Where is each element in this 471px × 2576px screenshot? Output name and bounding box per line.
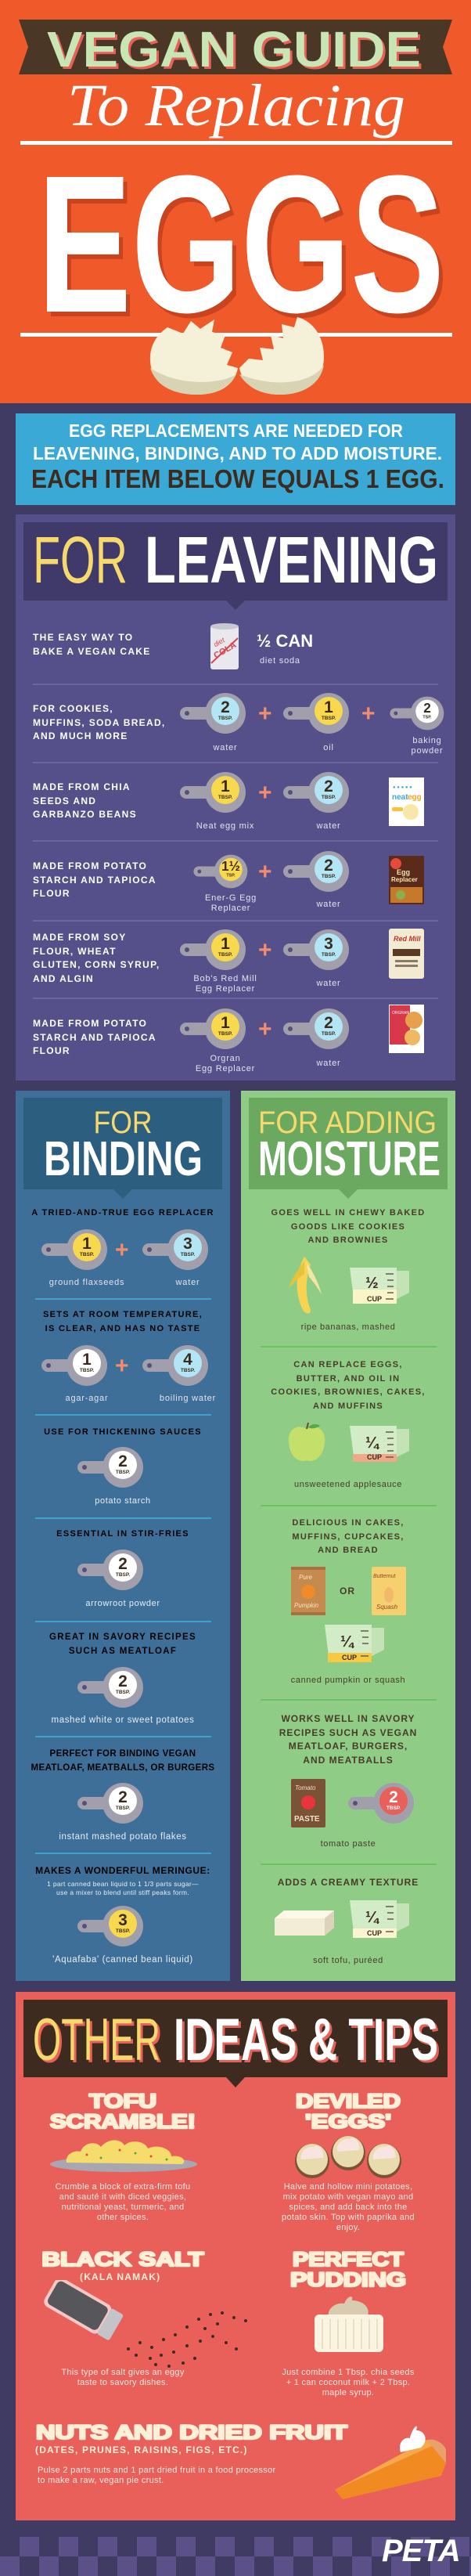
icon: quarter cup: CUP <box>367 1929 382 1937</box>
icon: ener-g box: Replacer <box>391 876 418 883</box>
moisture item: tomato paste: TBSP. <box>387 1806 401 1811</box>
row 5: bob's red mill: AND ALGIN <box>33 972 94 983</box>
row 5: bob's red mill: GLUTEN, CORN SYRUP, <box>33 959 160 970</box>
row 2: water oil baking powder: TBSP. <box>322 716 336 721</box>
binding item: mashed potatoes <box>49 1633 196 1725</box>
binding item: mashed potatoes: SUCH AS MEATLOAF <box>69 1646 177 1655</box>
icon: pumpkin can: Pure <box>299 1574 312 1581</box>
moisture item: soft tofu: soft tofu, puréed <box>313 1956 383 1965</box>
icon: salt shaker with grains <box>27 2280 253 2368</box>
tip: black salt: This type of salt gives an eggy <box>61 2368 185 2377</box>
row 4: ener-g: 2 <box>324 857 333 875</box>
moisture item: tomato paste: RECIPES SUCH AS VEGAN <box>279 1727 417 1738</box>
row 1: diet soda: BAKE A VEGAN CAKE <box>33 645 151 656</box>
heading: for leavening <box>23 522 448 610</box>
row 2: water oil baking powder: MUFFINS, SODA BREAD, <box>33 717 166 728</box>
moisture item: bananas <box>271 1208 426 1332</box>
binding item: potato flakes: MEATLOAF, MEATBALLS, OR BURGERS <box>31 1763 214 1773</box>
moisture item: applesauce: COOKIES, BROWNIES, CAKES, <box>271 1387 426 1397</box>
icon: cracked egg shells <box>150 317 324 395</box>
row 6: orgran: water <box>317 1059 340 1068</box>
binding item: potato starch: potato starch <box>95 1496 151 1506</box>
row 5: bob's red mill: FLOUR, WHEAT <box>33 946 117 957</box>
row 6: orgran: 2 <box>324 1014 333 1032</box>
binding item: aquafaba <box>35 1865 210 1964</box>
tip: tofu scramble: nutritional yeast, turmeric, and <box>62 2203 184 2212</box>
binding item: potato flakes: TBSP. <box>116 1806 130 1811</box>
icon: diet cola can <box>210 623 239 669</box>
moisture item: tomato paste: WORKS WELL IN SAVORY <box>281 1713 415 1724</box>
row 2: water oil baking powder: FOR COOKIES, <box>33 703 113 714</box>
row 4: ener-g: TBSP. <box>322 874 336 879</box>
row 2: water oil baking powder: AND MUCH MORE <box>33 731 128 741</box>
row 2: water oil baking powder: 2 <box>221 698 230 716</box>
tip: nuts and dried fruit: (DATES, PRUNES, RAISINS, FIGS, ETC.) <box>35 2444 248 2455</box>
moisture item: tomato paste: MEATLOAF, BURGERS, <box>289 1741 408 1752</box>
binding item: flaxseeds: 1 <box>82 1235 92 1253</box>
icon: quarter cup <box>325 1625 384 1662</box>
moisture item: bananas: ripe bananas, mashed <box>301 1322 395 1332</box>
binding item: arrowroot: arrowroot powder <box>85 1599 160 1608</box>
row 4: ener-g: MADE FROM POTATO <box>33 860 147 871</box>
binding item: potato starch: TBSP. <box>116 1470 130 1475</box>
tip: deviled eggs: DEVILED <box>296 2091 401 2112</box>
icon: pumpkin can <box>291 1567 325 1615</box>
moisture item: pumpkin or squash: DELICIOUS IN CAKES, <box>292 1518 404 1528</box>
tip: tofu scramble: other spices. <box>97 2213 149 2222</box>
intro info box: EGG REPLACEMENTS ARE NEEDED FOR <box>69 420 403 441</box>
row 5: bob's red mill: MADE FROM SOY <box>33 932 127 943</box>
row 5: bob's red mill: TBSP. <box>218 952 232 958</box>
row 4: ener-g: + <box>258 859 272 885</box>
icon: ener-g box: Egg <box>397 868 410 876</box>
moisture item: tomato paste: 2 <box>389 1788 398 1806</box>
row 3: neat egg <box>33 772 424 831</box>
header: orange title area <box>0 0 471 403</box>
row 5: bob's red mill: 3 <box>324 935 333 953</box>
row 4: ener-g: TSP. <box>226 873 236 878</box>
binding item: potato flakes: 2 <box>118 1788 128 1806</box>
binding item: agar-agar: + <box>115 1353 129 1379</box>
icon: bob's red mill bag: Red Mill <box>394 935 421 943</box>
tip: deviled eggs <box>282 2091 415 2232</box>
moisture item: soft tofu: ADDS A CREAMY TEXTURE <box>278 1877 419 1888</box>
binding item: flaxseeds: TBSP. <box>80 1252 94 1257</box>
moisture item: tomato paste: AND MEATBALLS <box>303 1754 394 1765</box>
heading: other ideas and tips: OTHER <box>35 2009 163 2076</box>
icon: ener-g box <box>389 856 424 904</box>
tip: deviled eggs: potato skin. Top with paprika and <box>282 2213 415 2222</box>
title banner ribbon: VEGAN GUIDE <box>49 23 423 80</box>
panel: for binding <box>16 1091 230 1981</box>
icon: pumpkin can: Pumpkin <box>294 1602 319 1609</box>
binding item: agar-agar: TBSP. <box>80 1368 94 1373</box>
binding item: agar-agar: TBSP. <box>181 1368 195 1373</box>
tip: black salt: taste to savory dishes. <box>77 2378 168 2387</box>
moisture item: applesauce <box>271 1360 426 1489</box>
moisture item: tomato paste <box>279 1713 417 1849</box>
tip: perfect pudding: + 1 can coconut milk + 2 Tbsp. <box>286 2378 410 2387</box>
heading: other ideas and tips: OTHER <box>33 2007 160 2073</box>
row 2: water oil baking powder: TBSP. <box>218 716 232 721</box>
binding item: agar-agar: boiling water <box>160 1394 216 1403</box>
icon: neat egg package: egg <box>408 793 422 802</box>
icon: quarter cup: ¼ <box>365 1434 380 1452</box>
icon: squash can: Butternut <box>373 1574 396 1579</box>
binding item: flaxseeds: TBSP. <box>181 1252 195 1257</box>
row 4: ener-g: Replacer <box>211 904 250 913</box>
binding item: potato flakes <box>31 1749 214 1842</box>
binding item: aquafaba: use a mixer to blend until stiff peaks form. <box>56 1889 189 1896</box>
moisture item: pumpkin or squash <box>291 1518 406 1685</box>
icon: quarter cup: CUP <box>367 1453 382 1461</box>
tip: deviled eggs: spices, and add back into the <box>289 2203 408 2212</box>
tip: deviled eggs: mix potato with vegan mayo and <box>283 2192 413 2202</box>
moisture item: bananas: GOODS LIKE COOKIES <box>291 1221 405 1231</box>
row 4: ener-g: 1½ <box>221 859 240 874</box>
row 5: bob's red mill: Bob's Red Mill <box>193 974 257 983</box>
tip: black salt: (KALA NAMAK) <box>80 2271 160 2282</box>
binding item: arrowroot: ESSENTIAL IN STIR-FRIES <box>56 1529 189 1539</box>
binding item: mashed potatoes: mashed white or sweet potatoes <box>52 1716 194 1725</box>
icon: orgran box: ORGRAN <box>392 1011 409 1016</box>
row 2: water oil baking powder: TSP. <box>422 715 432 720</box>
binding item: flaxseeds <box>31 1208 214 1287</box>
moisture item: bananas: AND BROWNIES <box>308 1236 388 1245</box>
row 3: neat egg: 2 <box>324 777 333 796</box>
intro info box: LEAVENING, BINDING, AND TO ADD MOISTURE. <box>33 443 442 464</box>
row 2: water oil baking powder: 2 <box>423 701 431 716</box>
row 6: orgran: + <box>258 1016 272 1042</box>
row 3: neat egg: MADE FROM CHIA <box>33 781 131 792</box>
icon: quarter cup <box>350 1900 409 1938</box>
row 2: water oil baking powder: powder <box>412 745 443 755</box>
binding item: arrowroot: 2 <box>118 1555 128 1573</box>
moisture item: tomato paste: tomato paste <box>321 1839 376 1849</box>
binding item: agar-agar: 4 <box>183 1351 192 1369</box>
binding item: agar-agar: 1 <box>82 1351 92 1369</box>
row 1: diet soda: THE EASY WAY TO <box>33 632 133 643</box>
icon: deviled potato eggs <box>292 2131 404 2178</box>
row 3: neat egg: 1 <box>221 777 230 796</box>
row 5: bob's red mill: 1 <box>221 935 230 953</box>
icon: half cup: CUP <box>367 1295 382 1303</box>
tip: tofu scramble <box>49 2091 197 2222</box>
icon: banana <box>289 1257 322 1314</box>
moisture item: applesauce: BUTTER, AND OIL IN <box>297 1373 400 1383</box>
row 6: orgran: Orgran <box>210 1054 241 1063</box>
binding item: flaxseeds: A TRIED-AND-TRUE EGG REPLACER <box>31 1208 214 1218</box>
logo: PETA: PETA <box>382 2534 460 2568</box>
row 4: ener-g: water <box>317 900 340 909</box>
binding item: mashed potatoes: TBSP. <box>116 1690 130 1695</box>
binding item: agar-agar <box>41 1310 216 1403</box>
row 5: bob's red mill: water <box>317 979 340 988</box>
intro info box <box>16 413 455 505</box>
row 4: ener-g: STARCH AND TAPIOCA <box>33 874 156 885</box>
title banner ribbon: VEGAN GUIDE <box>47 21 421 78</box>
icon: half cup <box>350 1268 409 1304</box>
row 6: orgran: FLOUR <box>33 1045 70 1056</box>
icon: squash can: Squash <box>376 1604 398 1611</box>
icon: tomato paste can: PASTE <box>294 1815 320 1824</box>
row 6: orgran: Egg Replacer <box>196 1063 255 1073</box>
tip: deviled eggs: enjoy. <box>336 2223 360 2232</box>
footer checker band <box>0 2537 471 2576</box>
binding item: aquafaba: TBSP. <box>116 1928 130 1934</box>
tip: perfect pudding <box>254 2246 442 2402</box>
binding item: flaxseeds: 3 <box>183 1235 192 1253</box>
moisture item: soft tofu <box>275 1877 419 1965</box>
row 4: ener-g: FLOUR <box>33 888 70 899</box>
row 5: bob's red mill: + <box>258 937 272 963</box>
moisture item: bananas: GOES WELL IN CHEWY BAKED <box>271 1208 426 1218</box>
moisture item: pumpkin or squash: MUFFINS, CUPCAKES, <box>292 1532 404 1541</box>
heading: for adding moisture: FOR ADDING <box>258 1106 437 1140</box>
row 4: ener-g: Ener-G Egg <box>205 893 257 903</box>
heading: other ideas and tips <box>23 2000 448 2087</box>
row 2: water oil baking powder: + <box>258 701 272 727</box>
binding item: agar-agar: agar-agar <box>66 1394 108 1403</box>
icon: neat egg package <box>389 777 424 826</box>
binding item: arrowroot: TBSP. <box>116 1572 130 1578</box>
moisture item: applesauce: unsweetened applesauce <box>294 1480 402 1489</box>
binding item: potato starch: 2 <box>118 1452 128 1470</box>
icon: diet cola can: COLA <box>212 640 238 661</box>
row 2: water oil baking powder <box>33 693 444 755</box>
binding item: agar-agar: IS CLEAR, AND HAS NO TASTE <box>45 1323 200 1333</box>
moisture item: applesauce: CAN REPLACE EGGS, <box>293 1360 403 1369</box>
tip: black salt <box>23 2246 250 2390</box>
binding item: flaxseeds: ground flaxseeds <box>49 1278 124 1287</box>
row 5: bob's red mill: Egg Replacer <box>196 983 255 993</box>
moisture item: applesauce: AND MUFFINS <box>313 1402 383 1411</box>
row 4: ener-g <box>33 851 424 913</box>
row 2: water oil baking powder: water <box>214 743 237 752</box>
binding item: potato flakes: instant mashed potato flakes <box>59 1832 187 1842</box>
binding item: potato starch: USE FOR THICKENING SAUCES <box>44 1427 202 1437</box>
icon: quarter cup: ¼ <box>340 1633 355 1651</box>
binding item: potato flakes: PERFECT FOR BINDING VEGAN <box>50 1749 196 1759</box>
tip: nuts and dried fruit <box>31 2418 446 2500</box>
icon: neat egg package: ● ● ● ● ● <box>393 785 412 790</box>
icon: tomato paste can <box>291 1779 325 1827</box>
tip: perfect pudding: maple syrup. <box>322 2388 374 2397</box>
moisture item: pumpkin or squash: OR <box>340 1586 355 1596</box>
tip: tofu scramble: TOFU <box>89 2091 156 2112</box>
heading: for leavening: FOR <box>33 523 128 597</box>
row 2: water oil baking powder: oil <box>323 743 334 752</box>
tip: nuts and dried fruit: Pulse 2 parts nuts and 1 part dried fruit in a food processor <box>38 2466 275 2475</box>
binding item: aquafaba: MAKES A WONDERFUL MERINGUE: <box>35 1865 210 1876</box>
row 2: water oil baking powder: + <box>361 701 376 727</box>
icon: pumpkin pie slice <box>333 2418 446 2499</box>
icon: quarter cup <box>350 1426 409 1462</box>
panel: for leavening <box>16 514 455 1081</box>
script subtitle: To Replacing <box>67 73 405 139</box>
binding item: potato starch <box>44 1427 202 1506</box>
tip: tofu scramble: and sauté it with diced veggies, <box>59 2192 186 2202</box>
heading: for binding: FOR <box>94 1106 152 1140</box>
icon: green apple <box>288 1422 325 1461</box>
row 3: neat egg: water <box>317 821 340 831</box>
binding item: aquafaba: 1 part canned bean liquid to 1 1/3 parts sugar— <box>47 1880 199 1888</box>
binding item: agar-agar: SETS AT ROOM TEMPERATURE, <box>43 1310 203 1319</box>
row 6: orgran: STARCH AND TAPIOCA <box>33 1032 156 1043</box>
icon: tofu block <box>275 1910 334 1936</box>
icon: pudding ramekin <box>313 2294 385 2354</box>
tip: nuts and dried fruit: to make a raw, vegan pie crust. <box>38 2476 164 2485</box>
row 3: neat egg: GARBANZO BEANS <box>33 809 137 820</box>
row 6: orgran: 1 <box>221 1014 230 1032</box>
icon: quarter cup: ¼ <box>365 1909 380 1926</box>
row 6: orgran <box>33 1005 424 1073</box>
row 6: orgran: MADE FROM POTATO <box>33 1018 147 1029</box>
row 3: neat egg: SEEDS AND <box>33 796 96 806</box>
icon: bob's red mill bag <box>389 929 424 979</box>
icon: tofu scramble plate <box>50 2140 197 2172</box>
tip: perfect pudding: PERFECT <box>293 2249 404 2271</box>
icon: half cup: ½ <box>365 1275 379 1292</box>
panel: other ideas and tips <box>16 1992 455 2520</box>
row 5: bob's red mill <box>33 929 424 993</box>
row 3: neat egg: TBSP. <box>322 795 336 800</box>
row 6: orgran: TBSP. <box>322 1031 336 1037</box>
heading: for adding moisture <box>249 1098 448 1199</box>
panel: for adding moisture <box>241 1091 455 1981</box>
icon: diet cola can: diet <box>212 636 226 648</box>
row 1: diet soda: diet soda <box>260 656 300 666</box>
row 6: orgran: TBSP. <box>218 1031 232 1037</box>
row 5: bob's red mill: TBSP. <box>322 952 336 958</box>
row 2: water oil baking powder: 1 <box>324 698 333 716</box>
binding item: flaxseeds: + <box>115 1237 129 1263</box>
binding item: mashed potatoes: GREAT IN SAVORY RECIPES <box>49 1633 196 1642</box>
binding item: aquafaba: 3 <box>118 1911 128 1929</box>
binding item: arrowroot <box>56 1529 189 1608</box>
binding item: mashed potatoes: 2 <box>118 1672 128 1690</box>
tip: deviled eggs: Halve and hollow mini potatoes, <box>284 2182 412 2192</box>
icon: orgran box <box>389 1005 424 1053</box>
icon: squash can <box>372 1567 406 1615</box>
icon: quarter cup: CUP <box>342 1654 357 1661</box>
row 1: diet soda <box>33 623 313 669</box>
row 3: neat egg: + <box>258 780 272 806</box>
tip: perfect pudding: Just combine 1 Tbsp. chia seeds <box>282 2368 415 2377</box>
icon: tomato paste can: Tomato <box>295 1784 316 1791</box>
row 3: neat egg: Neat egg mix <box>196 821 254 831</box>
binding item: flaxseeds: water <box>176 1278 200 1287</box>
tip: tofu scramble: Crumble a block of extra-firm tofu <box>56 2182 190 2192</box>
binding item: aquafaba: 'Aquafaba' (canned bean liquid) <box>52 1955 193 1964</box>
row 3: neat egg: TBSP. <box>218 795 232 800</box>
moisture item: pumpkin or squash: canned pumpkin or squash <box>291 1676 405 1685</box>
moisture item: pumpkin or squash: AND BREAD <box>318 1546 379 1555</box>
row 1: diet soda: ½ CAN <box>257 631 313 651</box>
icon: neat egg package: neat <box>392 793 408 802</box>
row 2: water oil baking powder: baking <box>412 736 442 745</box>
heading: for binding <box>23 1098 222 1199</box>
